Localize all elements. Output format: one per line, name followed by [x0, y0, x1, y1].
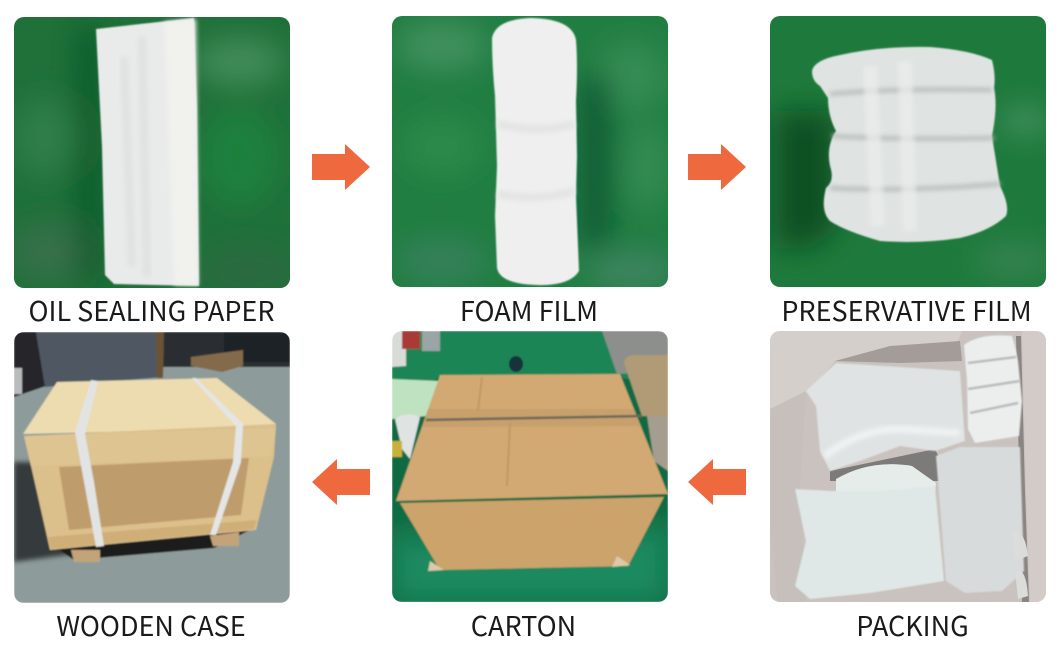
arrow: to wooden case — [312, 459, 370, 505]
photo: preservative film — [770, 16, 1055, 287]
label: carton: CARTON — [471, 605, 576, 644]
label: packing: PACKING — [856, 605, 969, 644]
label: foam film: FOAM FILM — [460, 290, 598, 329]
photo: carton — [392, 331, 668, 602]
arrow: to carton — [688, 459, 746, 505]
photo: foam film — [392, 16, 677, 291]
photo: oil sealing paper — [9, 17, 299, 297]
photo: wooden case — [14, 332, 290, 603]
arrow: to foam film — [312, 144, 370, 190]
photo: packing — [770, 331, 1046, 602]
label: wooden case: WOODEN CASE — [56, 605, 246, 644]
label: preservative film: PRESERVATIVE FILM — [781, 290, 1032, 329]
arrow: to preservative film — [688, 144, 746, 190]
label: oil sealing paper: OIL SEALING PAPER — [29, 290, 274, 329]
